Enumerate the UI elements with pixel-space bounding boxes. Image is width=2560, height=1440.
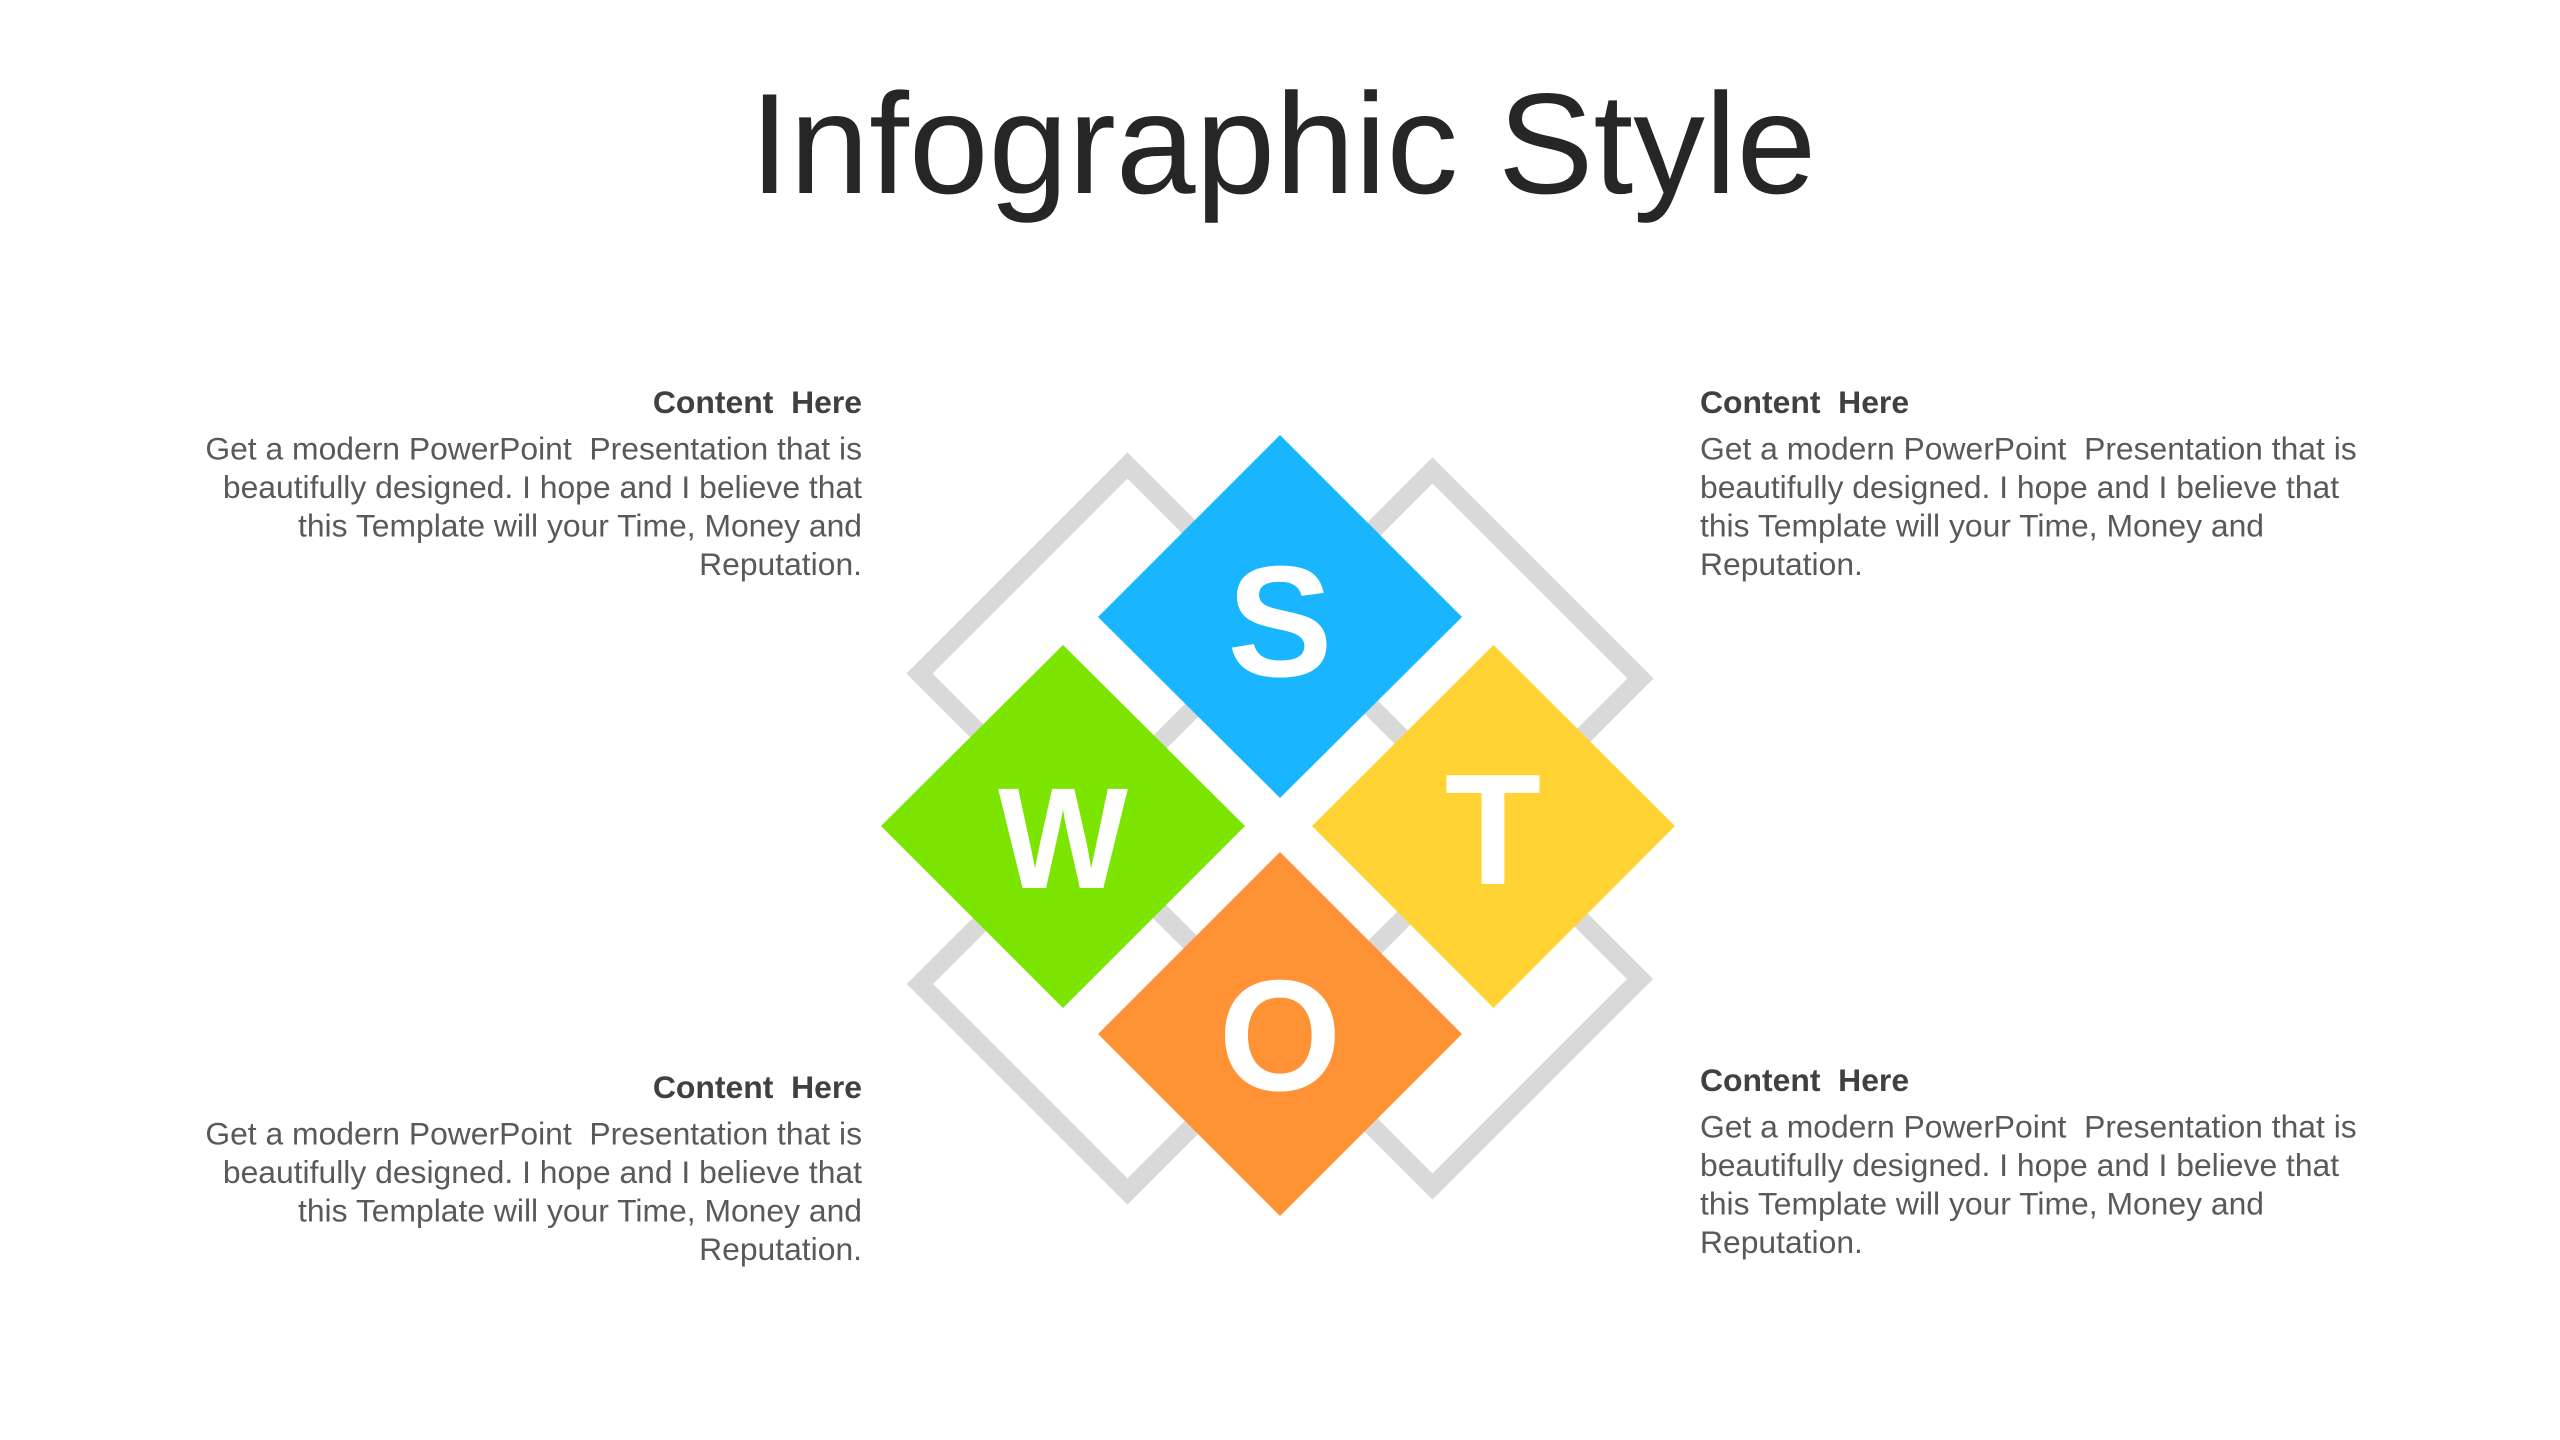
diamond S: [1098, 435, 1462, 798]
text block: top right: [1700, 384, 2357, 582]
title: Infographic Style: [750, 64, 1816, 224]
text block: top right: beautifully designed. I hope and I believe that: [1700, 469, 2339, 505]
text block: top left: [205, 384, 862, 582]
diamond W: [881, 645, 1245, 1008]
text block: bottom left: [205, 1069, 862, 1267]
text block: top right: Content Here: [1700, 384, 1909, 420]
text block: top right: Get a modern PowerPoint Presentation that is: [1700, 430, 2357, 466]
diamond W: W: [998, 758, 1128, 919]
text block: bottom left: Content Here: [653, 1069, 862, 1105]
text block: bottom right: Content Here: [1700, 1062, 1909, 1098]
text block: top right: Reputation.: [1700, 546, 1863, 582]
text block: top left: Reputation.: [699, 546, 862, 582]
diamond T: [1312, 645, 1675, 1008]
frame: top right: [1284, 470, 1640, 828]
text block: top left: this Template will your Time, Money and: [298, 508, 862, 544]
text block: bottom right: Get a modern PowerPoint Presentation that is: [1700, 1108, 2357, 1144]
text block: bottom left: this Template will your Time, Money and: [298, 1192, 862, 1228]
text block: bottom right: beautifully designed. I hope and I believe that: [1700, 1147, 2339, 1183]
text block: bottom left: Get a modern PowerPoint Presentation that is: [205, 1116, 862, 1152]
text block: bottom right: [1700, 1062, 2357, 1260]
text block: bottom right: this Template will your Time, Money and: [1700, 1186, 2264, 1222]
text block: top left: Get a modern PowerPoint Presentation that is: [205, 430, 862, 466]
text block: top right: this Template will your Time, Money and: [1700, 508, 2264, 544]
diamond O: [1098, 852, 1462, 1216]
diamond T: T: [1445, 742, 1541, 918]
text block: bottom left: Reputation.: [699, 1231, 862, 1267]
frame: top left: [920, 466, 1282, 828]
diamond S: S: [1227, 534, 1333, 710]
text block: bottom right: Reputation.: [1700, 1224, 1863, 1260]
text block: bottom left: beautifully designed. I hope and I believe that: [223, 1154, 862, 1190]
frame: bottom left: [920, 828, 1284, 1192]
SWOT diagram: [881, 435, 1675, 1216]
text block: top left: Content Here: [653, 384, 862, 420]
frame: bottom right: [1284, 830, 1640, 1186]
text block: top left: beautifully designed. I hope and I believe that: [223, 469, 862, 505]
diamond O: O: [1219, 948, 1341, 1124]
